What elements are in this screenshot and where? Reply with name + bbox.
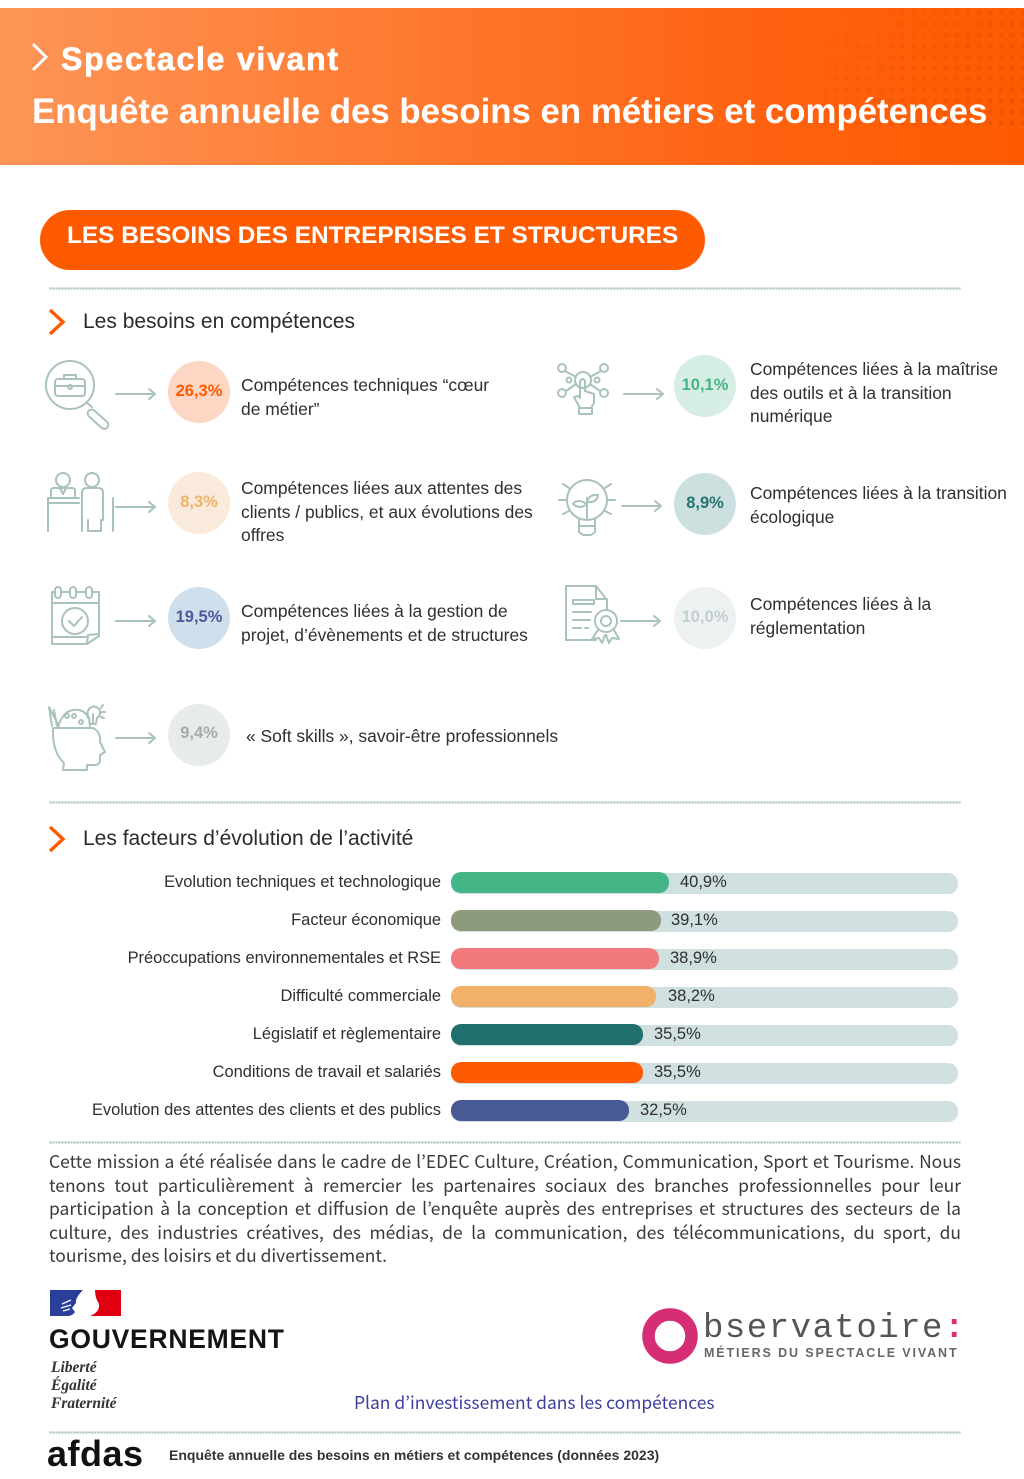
bar row 4: 38,2% [668,987,715,1005]
bar row 3: 38,9% [670,949,717,967]
bar row 5 [253,1024,958,1046]
value circle: 10,1% [682,376,728,394]
mission text block: tenons tout particulièrement à remercier les partenaires sociaux des branches professionnelles pour leur [49,1173,961,1198]
label: écologique [750,506,834,526]
icon: magnifier with briefcase [45,360,110,430]
mission text block: participation à la conception et diffusion de l’enquête auprès des entreprises et structures des secteurs de la [49,1196,961,1221]
bar row 4 [281,986,958,1008]
label [241,478,533,545]
item: attentes des clients [47,472,533,545]
flag [50,1290,123,1318]
value circle [674,587,736,649]
icon: eco bulb [558,479,616,536]
ring [642,1308,698,1364]
logo: observatoire [640,1305,965,1367]
motto [51,1359,116,1413]
bar row 5: 35,5% [654,1025,701,1043]
logo: gouvernement [49,1290,285,1412]
arrow [621,500,662,512]
arrow [620,615,661,627]
bar chart: facteurs [92,872,958,1122]
bar row 3: Préoccupations environnementales et RSE [128,949,441,967]
label: Compétences liées aux attentes des [241,478,522,498]
label: Compétences liées à la gestion de [241,601,508,621]
value circle: 26,3% [176,382,222,400]
value circle: 10,0% [682,608,728,626]
bar row 7: Evolution des attentes des clients et des publics [92,1101,441,1119]
mission text block: Cette mission a été réalisée dans le cadre de l’EDEC Culture, Création, Communication, Sport et Tourisme. Nous [49,1149,961,1174]
banner dot pattern [867,10,1024,126]
item: transition écologique [558,473,1007,536]
bar row 2: 39,1% [671,911,718,929]
label: « Soft skills », savoir-être professionnels [246,726,558,746]
motto: Liberté [51,1359,97,1376]
tagline: MÉTIERS DU SPECTACLE VIVANT [704,1346,958,1360]
label: clients / publics, et aux évolutions des [241,502,533,522]
item: réglementation [565,585,932,649]
icon: touch network [557,363,609,415]
icon: calendar check [51,586,100,645]
motto: Égalité [51,1377,97,1394]
bar row 1: Evolution techniques et technologique [164,873,441,891]
mission text block [49,1149,961,1268]
bar row 6: 35,5% [654,1063,701,1081]
bar row 2 [291,910,958,932]
label: des outils et à la transition [750,382,952,402]
section pill heading [40,210,705,270]
arrow [115,732,156,744]
label [750,483,1007,526]
label [750,359,998,426]
footer text: Enquête annuelle des besoins en métiers et compétences (données 2023) [169,1447,659,1463]
icon: head with ideas [48,704,106,771]
label: de métier” [241,398,320,418]
bar row 7 [92,1100,958,1122]
label [241,601,528,644]
value circle: 8,3% [180,493,218,511]
value circle: 9,4% [180,724,218,742]
header banner [0,8,1024,165]
arrow [115,388,156,400]
name: GOUVERNEMENT [49,1324,285,1354]
label: réglementation [750,618,865,638]
label: offres [241,525,284,545]
label: projet, d’évènements et de structures [241,624,528,644]
section pill heading: LES BESOINS DES ENTREPRISES ET STRUCTURES [67,222,678,249]
arrow [623,388,664,400]
item: outils numériques [557,355,998,426]
plan text: Plan d’investissement dans les compétences [354,1390,715,1415]
bar row 3 [128,948,958,970]
value circle [168,472,230,534]
bar row 5: Législatif et règlementaire [253,1025,441,1043]
banner title: Enquête annuelle des besoins en métiers et compétences [32,92,987,131]
bar row 6: Conditions de travail et salariés [213,1063,441,1081]
mission text block: culture, des industries créatives, des médias, de la communication, des télécommunications, du sport, du [49,1220,961,1245]
arrow [115,615,156,627]
value circle: 19,5% [176,608,222,626]
bar row 7: 32,5% [640,1101,687,1119]
motto: Fraternité [51,1395,116,1412]
banner subtitle: Spectacle vivant [61,41,340,77]
mission text block: tourisme, des loisirs et du divertissement. [49,1243,387,1268]
logo: afdas: afdas [47,1433,144,1474]
value circle [674,355,736,417]
bar row 1: 40,9% [680,873,727,891]
label: Compétences techniques “cœur [241,375,489,395]
bar row 6 [213,1062,958,1084]
label: numérique [750,406,832,426]
value circle [168,704,230,766]
bar row 2: Facteur économique [291,911,441,929]
value circle: 8,9% [686,494,724,512]
value circle [674,473,736,535]
label [241,375,489,418]
icon: certificate document [565,585,620,644]
label: Compétences liées à la [750,594,931,614]
label: Compétences liées à la transition [750,483,1007,503]
bar row 1 [164,872,958,894]
item: gestion de projet [51,586,528,649]
heading: besoins en compétences: Les besoins en compétences [83,310,355,333]
label [750,594,932,638]
item: soft skills [48,704,558,771]
heading: facteurs d'évolution: Les facteurs d’évolution de l’activité [83,827,413,850]
label: Compétences liées à la maîtrise [750,359,998,379]
arrow [115,501,156,513]
value circle [168,361,230,423]
icon: people at desk [47,472,114,532]
wordmark: bservatoire: [703,1310,966,1348]
bar row 4: Difficulté commerciale [281,987,441,1005]
banner chevron [32,43,48,71]
value circle [168,587,230,649]
item: coeur de métier [45,360,489,430]
